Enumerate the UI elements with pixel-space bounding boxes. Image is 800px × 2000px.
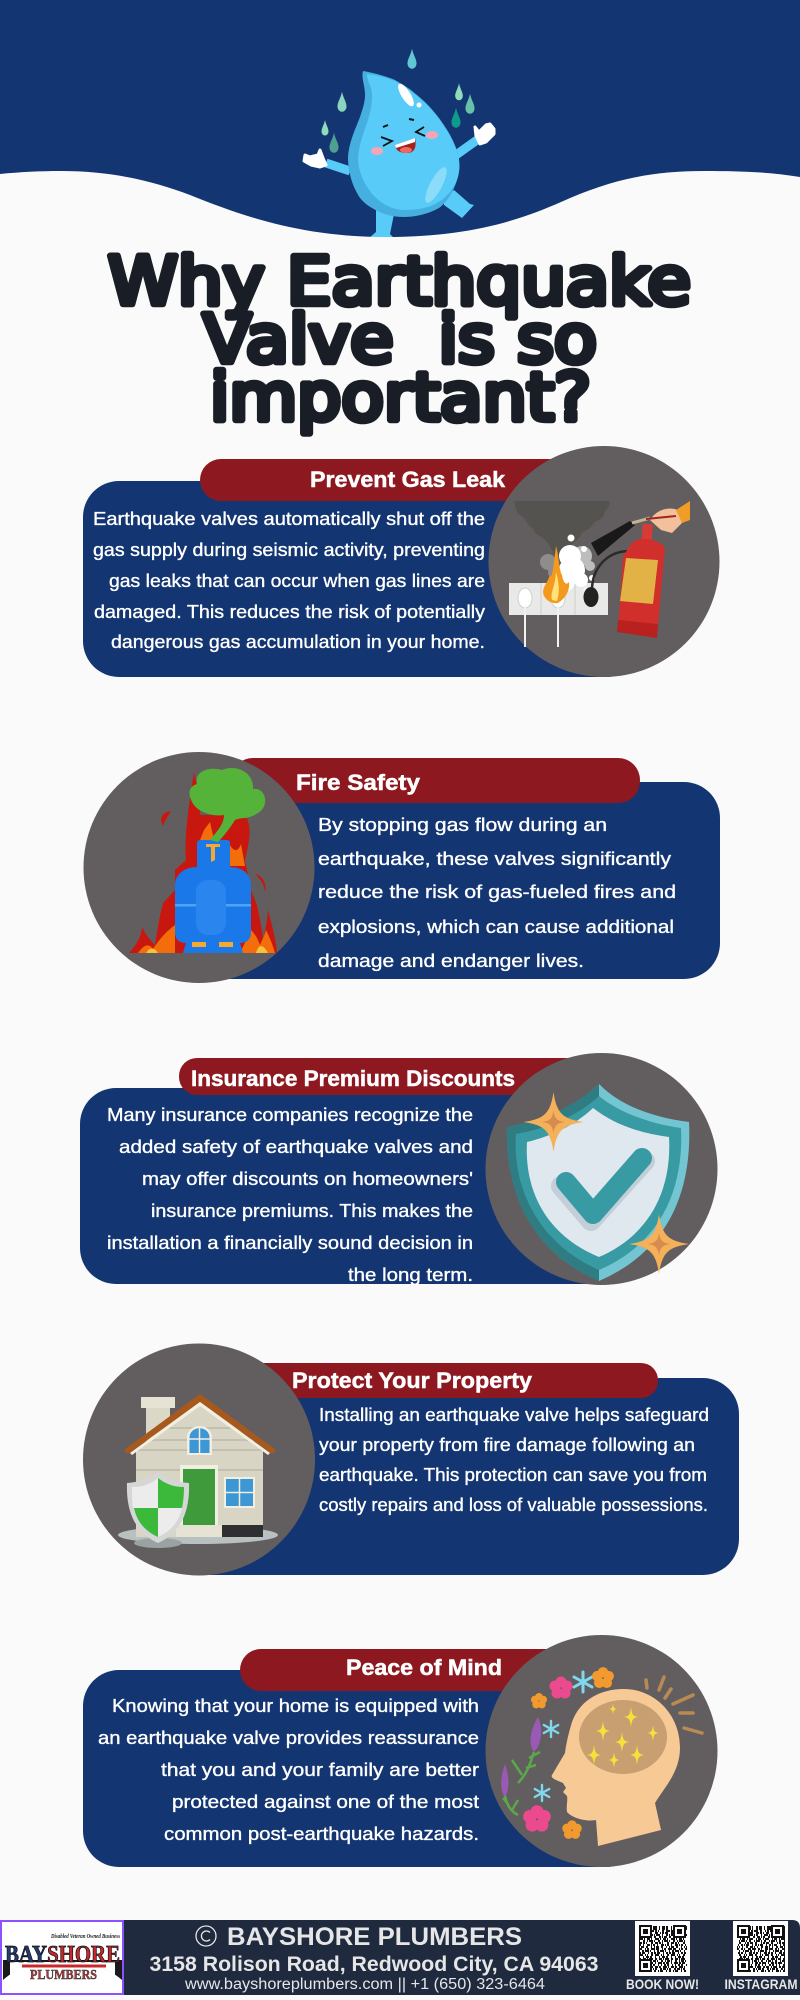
- panel: peace of mind: [83, 1635, 718, 1867]
- logo: Bayshore Plumbers: PLUMBERS: [30, 1968, 97, 1983]
- logo: Bayshore Plumbers: [1, 1921, 123, 1994]
- panel: insurance premium discounts: [80, 1053, 718, 1285]
- extinguisher: [617, 524, 665, 638]
- wave divider: [0, 171, 800, 242]
- body text: protected against one of the most: [172, 1792, 479, 1812]
- body text: gas supply during seismic activity, preventing: [93, 540, 485, 560]
- hands: [304, 124, 494, 167]
- heading tab: Prevent Gas Leak: [310, 467, 506, 492]
- body text: costly repairs and loss of valuable possessions.: [319, 1495, 708, 1515]
- body text: [107, 1105, 473, 1285]
- body text: added safety of earthquake valves and: [119, 1137, 473, 1157]
- flames: [129, 772, 277, 953]
- body text: damaged. This reduces the risk of potentially: [94, 602, 485, 622]
- foam cloud: [540, 534, 595, 592]
- wall sockets: [509, 583, 608, 647]
- header banner: [0, 0, 800, 242]
- body text: explosions, which can cause additional: [318, 917, 674, 937]
- body text: Earthquake valves automatically shut off the: [93, 509, 485, 529]
- body text: insurance premiums. This makes the: [151, 1201, 473, 1221]
- title: [108, 243, 691, 436]
- icon: gas cylinder on fire: [84, 752, 314, 983]
- top window: [187, 1426, 212, 1455]
- heading tab: [179, 1058, 599, 1095]
- right window: [224, 1477, 255, 1508]
- plug and hose: [592, 551, 628, 590]
- shield: [127, 1472, 189, 1543]
- panel: protect your property: [83, 1344, 739, 1576]
- QR code: book now: [635, 1921, 690, 1976]
- face: [371, 119, 438, 155]
- chimney: [141, 1397, 175, 1440]
- QR code: instagram: [733, 1921, 788, 1976]
- brain stars: [587, 1704, 659, 1768]
- head: [552, 1689, 680, 1846]
- label: book now: BOOK NOW!: [626, 1976, 699, 1992]
- highlights: [395, 82, 417, 108]
- heading tab: [200, 459, 620, 501]
- body text: reduce the risk of gas-fueled fires and: [318, 882, 676, 902]
- body text: the long term.: [348, 1265, 473, 1285]
- body text: gas leaks that can occur when gas lines are: [109, 571, 485, 591]
- body text: an earthquake valve provides reassurance: [98, 1728, 479, 1748]
- nozzle: [591, 521, 635, 556]
- body text: [319, 1405, 709, 1515]
- flowers: [523, 1667, 614, 1839]
- small falling drops: [322, 49, 475, 153]
- body text: that you and your family are better: [161, 1760, 479, 1780]
- valve: [206, 844, 220, 862]
- icon: head with stars and flowers: [486, 1635, 718, 1867]
- body text: Installing an earthquake valve helps safeguard: [319, 1405, 709, 1425]
- body text: By stopping gas flow during an: [318, 815, 607, 835]
- title: Valve is so: [203, 301, 597, 378]
- walls: [136, 1398, 263, 1537]
- address: 3158 Rolison Road, Redwood City, CA 94063: [150, 1953, 598, 1976]
- icon: house with shield: [83, 1344, 315, 1576]
- heading tab: [240, 1363, 658, 1398]
- body text: earthquake. This protection can save you from: [319, 1465, 707, 1485]
- body text: earthquake, these valves significantly: [318, 849, 671, 869]
- body text: damage and endanger lives.: [318, 951, 584, 971]
- body text: [98, 1696, 479, 1844]
- heading tab: Insurance Premium Discounts: [191, 1066, 515, 1091]
- heading tab: Peace of Mind: [346, 1655, 502, 1680]
- body text: Many insurance companies recognize the: [107, 1105, 473, 1125]
- body text: Knowing that your home is equipped with: [112, 1696, 479, 1716]
- logo: Bayshore Plumbers: Disabled Veteran Owned Business: [50, 1933, 120, 1940]
- panel: fire safety: [84, 752, 720, 983]
- body text: your property from fire damage following an: [319, 1435, 695, 1455]
- gas cloud: [190, 768, 265, 842]
- heading tab: Fire Safety: [296, 770, 421, 795]
- icon: water drop mascot: [304, 49, 494, 238]
- body text: common post-earthquake hazards.: [164, 1824, 479, 1844]
- title: Why Earthquake: [108, 243, 691, 320]
- legs: [369, 190, 474, 238]
- arms: [326, 140, 477, 171]
- body text: installation a financially sound decision in: [107, 1233, 473, 1253]
- body text: dangerous gas accumulation in your home.: [111, 632, 485, 652]
- cylinder: [175, 840, 251, 953]
- footer: [1, 1920, 800, 1995]
- logo: Bayshore Plumbers: BAYSHORE: [5, 1942, 120, 1968]
- heading tab: Protect Your Property: [292, 1368, 533, 1393]
- title: important?: [210, 359, 591, 436]
- icon: shield with check: [486, 1053, 718, 1285]
- side sparks: [161, 811, 266, 892]
- panel: prevent gas leak: [83, 446, 720, 677]
- rays: [646, 1677, 702, 1733]
- company name: BAYSHORE PLUMBERS: [227, 1923, 522, 1951]
- drop body: [348, 71, 459, 217]
- roof: [124, 1394, 276, 1454]
- sparkle stars: [524, 1092, 689, 1274]
- smoke: [514, 501, 610, 562]
- brain: [579, 1700, 667, 1774]
- icon: fire extinguisher and burning socket: [488, 446, 720, 677]
- footer band: [124, 1920, 800, 1995]
- hand: [646, 501, 690, 533]
- flames: [543, 546, 569, 603]
- door: [180, 1465, 218, 1525]
- website and phone: www.bayshoreplumbers.com || +1 (650) 323-6464: [184, 1976, 545, 1993]
- heading tab: [240, 1649, 620, 1691]
- heading tab: [231, 758, 640, 803]
- body text: [93, 509, 485, 652]
- body text: may offer discounts on homeowners': [142, 1169, 473, 1189]
- body text: [318, 815, 676, 971]
- lavender sprigs: [501, 1717, 541, 1815]
